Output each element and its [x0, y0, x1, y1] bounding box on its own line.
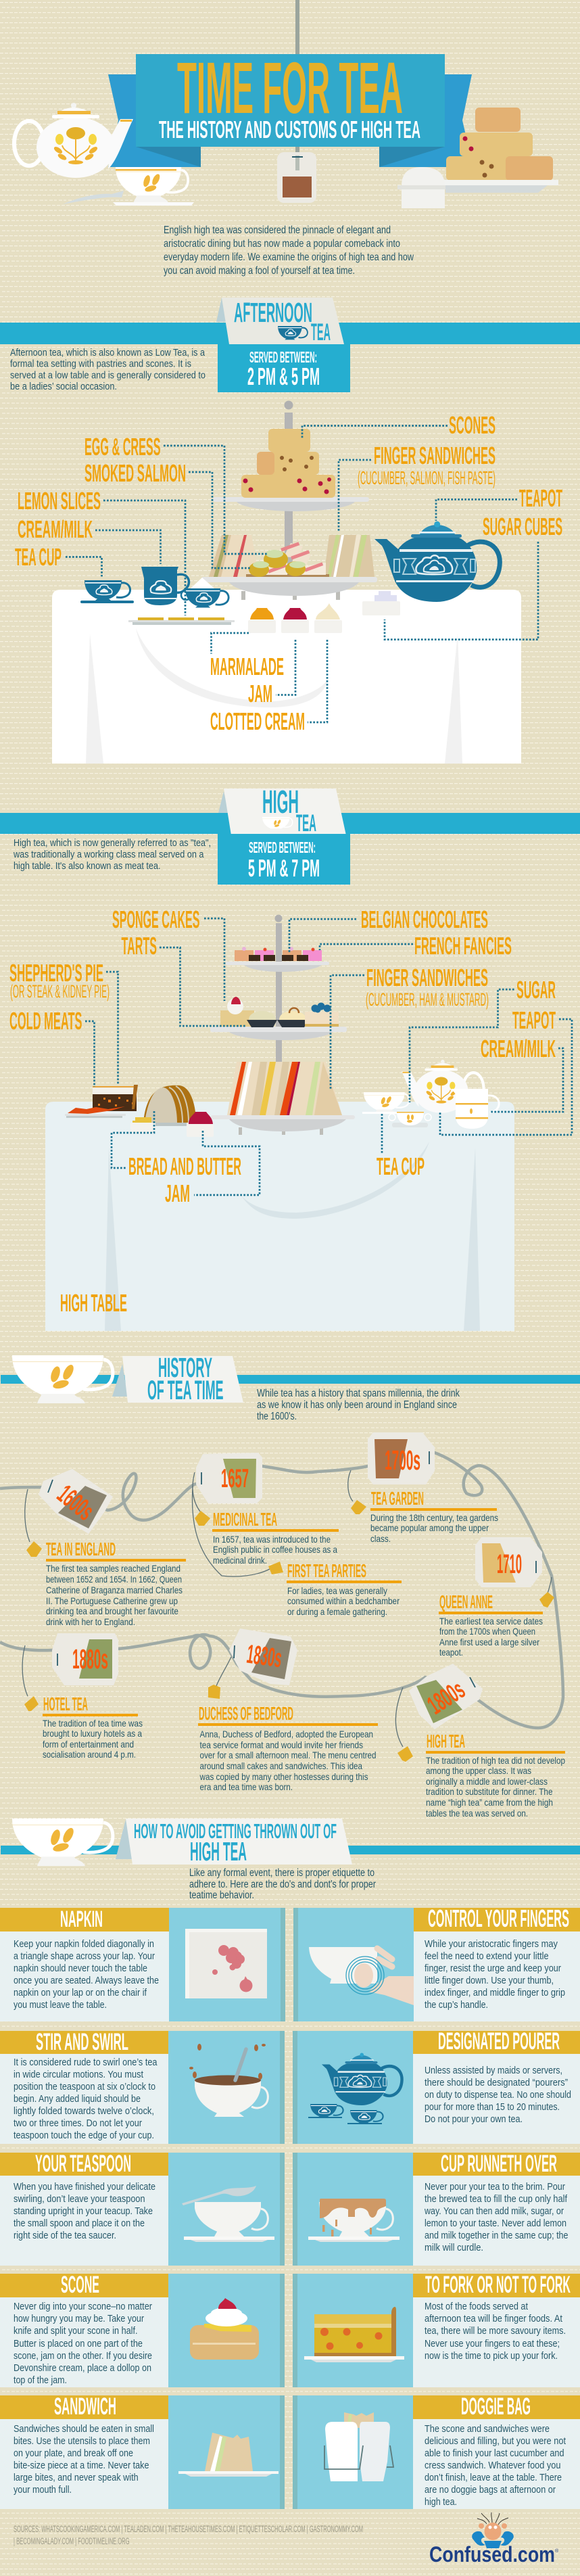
history entry: duchess of bedford: tea service format and would invite her friends: [200, 1739, 363, 1750]
banner panel: [136, 54, 445, 147]
panel: designated pourer: [293, 2028, 580, 2144]
history entry: medicinal tea: [212, 1509, 339, 1566]
egg and cress and salmon sandwiches: [246, 542, 329, 577]
section header: high tea: HIGH: [262, 784, 299, 820]
wordmark: Confused.com: [429, 2542, 555, 2567]
cloth folds: [105, 1142, 480, 1331]
butter dish: [130, 1117, 155, 1133]
labels: TARTS: [122, 932, 157, 960]
history entry: duchess of bedford: around small cakes and sandwiches. This idea: [200, 1760, 362, 1771]
finger sandwiches right: [324, 535, 374, 577]
section header: afternoon tea: [0, 297, 580, 392]
section header: high tea: [0, 784, 580, 885]
ribbon folds: [136, 147, 445, 167]
body text: two or three times. Do not let your: [14, 2117, 142, 2129]
body text: you must leave the table.: [14, 1999, 107, 2011]
body text: [14, 2423, 154, 2496]
history entry: duchess of bedford: Anna, Duchess of Bedford, adopted the European: [200, 1729, 373, 1739]
body text: napkin on your lap or on the chair if: [14, 1987, 147, 1998]
labels: EGG & CRESS: [84, 433, 161, 461]
logo: confused.com: [429, 2512, 559, 2567]
labels: SHEPHERD'S PIE: [9, 959, 103, 987]
body text: [424, 2181, 568, 2253]
history entry: tea in england: The first tea samples reached England: [46, 1563, 180, 1574]
body text: your mouth full.: [14, 2484, 72, 2496]
icon: overflowing cup: [308, 2199, 400, 2242]
scones: [241, 429, 335, 498]
icon: stirred tea cup: [189, 2044, 268, 2117]
labels: HIGH TABLE: [60, 1289, 127, 1317]
ribbon left tail: [108, 74, 201, 167]
labels: JAM: [248, 680, 272, 707]
body text: bite-size piece at a time. Never take: [14, 2460, 149, 2471]
body text: [425, 1938, 565, 2011]
history entry: first tea parties: For ladies, tea was generally: [287, 1585, 387, 1596]
tea bag: 1657: 1657: [221, 1464, 249, 1493]
tea bag: 1710: [475, 1537, 542, 1587]
icon: scone with cream: [190, 2298, 259, 2360]
history entry: medicinal tea: medicinal drink.: [213, 1555, 267, 1566]
icon: blue teapot: [374, 521, 500, 602]
icon: milk jug: [452, 1089, 499, 1129]
history entry: tea in england: drinking tea and brought her favourite: [46, 1606, 178, 1616]
icon: paper bag with sandwich: [324, 2412, 393, 2481]
history entry: tea in england: drink with her to England.: [46, 1616, 135, 1627]
history entry: hotel tea: socialisation around 4 p.m.: [43, 1749, 136, 1760]
body text: teaspoon touch the edge of your cup.: [14, 2130, 154, 2141]
body text: [14, 2181, 155, 2241]
string of hanging tea bag: [295, 0, 299, 162]
labels: JAM: [165, 1179, 190, 1207]
french fancies and belgian chocolates: [235, 947, 322, 961]
labels: [15, 411, 562, 735]
table cloth: [52, 590, 521, 764]
labels: CLOTTED CREAM: [210, 707, 305, 735]
icon: teacup with spoon: [63, 167, 194, 206]
labels: BREAD AND BUTTER: [128, 1152, 241, 1180]
icon: mascot: [472, 2512, 514, 2548]
labels: [9, 906, 556, 1317]
tea bag: 1600s: 1600s: [51, 1480, 99, 1526]
body text: It is considered rude to swirl one’s tea: [14, 2057, 158, 2068]
body text: [14, 1938, 159, 2011]
labels: TEA CUP: [15, 543, 62, 571]
ribbon right tail: [379, 74, 473, 167]
section header: afternoon tea: SERVED BETWEEN:: [249, 348, 317, 366]
icon: scones on plate with ramekin: [397, 108, 558, 208]
served between box: [218, 344, 350, 392]
cloth folds: [86, 628, 462, 764]
body text: begin. Any added liquid should be: [14, 2093, 141, 2105]
section header: afternoon tea: 2 PM & 5 PM: [247, 362, 320, 390]
icon: cup with spoon: [182, 2186, 274, 2242]
band: [1, 1846, 580, 1854]
icon: quiche slice: [304, 2307, 404, 2362]
panel: scone: SCONE: [61, 2272, 99, 2298]
body text: little finger down. Use your thumb,: [425, 1975, 554, 1986]
labels: MARMALADE: [210, 653, 284, 680]
body text: swirling, don’t leave your teaspoon: [14, 2193, 145, 2205]
sponge cake: [220, 997, 254, 1027]
panel: sandwich: SANDWICH: [54, 2393, 116, 2420]
icon: big white cup: [12, 1819, 113, 1866]
panel: cup runneth over: [293, 2151, 580, 2266]
history entry: hotel tea: form of entertainment and: [43, 1739, 134, 1750]
cake stand: [210, 914, 355, 1135]
history entry: tea in england: Catherine of Braganza married Charles: [46, 1585, 183, 1595]
body text: the small spoon and place it on the: [14, 2218, 145, 2229]
body text: The scone and sandwiches were: [425, 2423, 550, 2435]
body text: bites. Use the utensils to place them: [14, 2435, 150, 2447]
history entry: medicinal tea: English public in coffee houses as a: [213, 1544, 337, 1555]
intro text: English high tea was considered the pinnacle of elegant and: [164, 225, 391, 236]
intro text: you can avoid making a fool of yourself at tea time.: [164, 265, 355, 277]
tent card side: [112, 1364, 128, 1397]
pots of marmalade, jam and clotted cream: [248, 603, 342, 633]
high tea description: was traditionally a working class meal served on a: [13, 849, 204, 860]
panel: your teaspoon: YOUR TEASPOON: [35, 2151, 131, 2177]
body text: cress sandwich. Whatever food you: [425, 2460, 561, 2471]
afternoon tea description: formal tea setting with pastries and scones. It is: [10, 358, 191, 369]
labels: COLD MEATS: [9, 1007, 82, 1035]
icon: white cup: [262, 817, 293, 831]
icon: tea cup and saucer: [80, 580, 134, 603]
tent card side: [218, 791, 228, 813]
blueberry cake: [305, 1002, 339, 1027]
panel: stir and swirl: STIR AND SWIRL: [36, 2029, 128, 2055]
icon: big white cup: [12, 1355, 113, 1403]
sugar cubes pot: [362, 591, 400, 615]
jam pot: [187, 1112, 214, 1137]
body text: Most of the foods served at: [425, 2301, 529, 2312]
panel: sandwich: [0, 2393, 285, 2509]
panel: your teaspoon: [0, 2151, 285, 2266]
panel: napkin: NAPKIN: [60, 1906, 103, 1932]
panel: control your fingers: [293, 1904, 580, 2021]
served between box: [218, 834, 350, 885]
history entry: first tea parties: consumed within a bedchamber: [287, 1595, 400, 1606]
tent card: [122, 1356, 243, 1403]
section header: history of tea time: [1, 1352, 580, 1405]
etiquette intro text: [189, 1867, 376, 1901]
icon: blue cup: [278, 326, 308, 339]
history entry: tea in england: TEA IN ENGLAND: [46, 1539, 116, 1560]
history intro text: the 1600's.: [257, 1411, 297, 1422]
history entry: hotel tea: brought to luxury hotels as a: [43, 1728, 142, 1739]
etiquette intro text: adhere to. Here are the do's and dont's for proper: [189, 1879, 376, 1890]
bread loaf: [143, 1085, 196, 1126]
band: [0, 323, 580, 344]
history entry: queen anne: Anne first used a large silver: [439, 1637, 539, 1647]
labels: TEA CUP: [377, 1152, 425, 1180]
history entry: high tea: tradition to substitute for dinner. The: [426, 1786, 553, 1797]
body text: When you have finished your delicate: [14, 2181, 155, 2193]
tea bag: 1880s: [52, 1633, 118, 1685]
icon: hand holding cup: [309, 1947, 414, 2005]
body text: position the teaspoon at six o’clock to: [14, 2081, 155, 2092]
body text: the cup’s handle.: [425, 1999, 488, 2011]
section header: high tea: TEA: [296, 810, 316, 837]
icon: small cup: [389, 1112, 431, 1127]
panel: afternoon tea table: [15, 400, 562, 764]
cake stand: [201, 400, 377, 600]
body text: While your aristocratic fingers may: [425, 1938, 558, 1950]
section header: afternoon tea: AFTERNOON: [234, 297, 312, 328]
tea bag: 1600s: [39, 1469, 113, 1534]
panel: to fork or not to fork: [293, 2272, 580, 2387]
tent card: [222, 298, 344, 344]
afternoon tea description: be a ladies’ social occasion.: [10, 381, 117, 392]
body text: Do not pour your own tea.: [425, 2113, 523, 2125]
intro text: [164, 225, 414, 277]
tent card: [224, 789, 346, 835]
history entry: queen anne: teapot.: [439, 1647, 463, 1658]
history entry: duchess of bedford: [198, 1703, 378, 1792]
history entry: first tea parties: FIRST TEA PARTIES: [287, 1560, 366, 1581]
tarts: [247, 1008, 309, 1027]
labels: (OR STEAK & KIDNEY PIE): [10, 981, 110, 1002]
labels: CREAM/MILK: [18, 515, 93, 543]
high tea description: [13, 838, 211, 872]
tea bag: 1880s: 1880s: [72, 1643, 108, 1675]
sources: [14, 2524, 363, 2546]
title banner: [108, 0, 473, 167]
body text: a triangle shape across your lap. Your: [14, 1950, 155, 1962]
tea bag: 1700s: 1700s: [385, 1445, 420, 1476]
history entry: tea garden: TEA GARDEN: [371, 1488, 424, 1509]
body text: high tea.: [425, 2496, 457, 2508]
tea bag: 1830s: 1830s: [245, 1640, 284, 1673]
leader lines: [85, 918, 572, 1195]
history entry: high tea: [426, 1731, 565, 1819]
history entry: queen anne: The earliest tea service dates: [439, 1616, 543, 1626]
body text: scone, jam on the other. If you desire: [14, 2350, 152, 2362]
etiquette intro text: teatime behavior.: [189, 1890, 254, 1901]
history entry: first tea parties: or during a female gathering.: [287, 1606, 387, 1617]
history entry: hotel tea: HOTEL TEA: [43, 1693, 88, 1714]
high tea description: High tea, which is now generally referred to as "tea",: [14, 838, 211, 849]
icon: tea bag: [277, 152, 316, 203]
leader lines: [66, 426, 538, 722]
table cloth: [45, 1102, 514, 1331]
panel: doggie bag: [293, 2393, 580, 2509]
history entry: tea garden: [370, 1488, 498, 1544]
history intro text: as we know it has only been around in England since: [257, 1399, 457, 1411]
icon: white teapot: [14, 103, 133, 178]
labels: SMOKED SALMON: [84, 459, 186, 487]
labels: LEMON SLICES: [18, 487, 101, 515]
icon: tea cup: [362, 1092, 409, 1114]
intro text: aristocratic dining but has now made a popular comeback into: [164, 238, 400, 250]
icon: second tea cup with cream: [181, 578, 228, 607]
section header: history of tea time: HISTORY: [158, 1352, 212, 1383]
history entry: duchess of bedford: over for a small afternoon meal. The menu centred: [200, 1750, 376, 1760]
history entry: tea in england: between 1652 and 1654. In 1662, Queen: [46, 1574, 182, 1585]
section header: etiquette: HOW TO AVOID GETTING THROWN OUT OF: [134, 1820, 337, 1843]
section header: high tea: SERVED BETWEEN:: [249, 839, 316, 856]
body text: Never dig into your scone–no matter: [14, 2301, 152, 2312]
history entry: tea in england: [46, 1539, 186, 1627]
body text: Sandwiches should be eaten in small: [14, 2423, 154, 2435]
section header: etiquette: [1, 1819, 580, 1867]
body text: are no doggie bags at afternoon or: [425, 2484, 556, 2496]
section header: high tea: 5 PM & 7 PM: [248, 854, 320, 882]
section header: etiquette: HIGH TEA: [190, 1837, 247, 1867]
history entry: high tea: HIGH TEA: [427, 1731, 465, 1752]
lemon slices plate: [128, 617, 235, 625]
tags: [24, 1500, 554, 1762]
afternoon tea description: Afternoon tea, which is also known as Low Tea, is a: [10, 348, 206, 358]
body text: milk will curdle.: [425, 2242, 483, 2253]
history entry: tea garden: became popular among the upper: [370, 1522, 489, 1533]
body text: now is the time to pick up your fork.: [425, 2350, 558, 2362]
body text: [425, 2301, 566, 2362]
tent card side: [216, 298, 226, 322]
history entry: queen anne: from the 1700s when Queen: [439, 1626, 535, 1637]
panel: high tea table: [9, 906, 572, 1331]
history entry: high tea: among the upper class. It was: [426, 1765, 531, 1776]
history entry: first tea parties: [287, 1560, 402, 1617]
tea bag: 1710: 1710: [497, 1549, 522, 1579]
body text: [14, 2301, 152, 2386]
body text: [425, 2423, 566, 2508]
body text: lightly folded towards twelve o’clock,: [14, 2105, 154, 2117]
history entry: hotel tea: The tradition of tea time was: [43, 1718, 143, 1729]
etiquette intro text: Like any formal event, there is proper etiquette to: [189, 1867, 374, 1879]
body text: napkin should never touch the table: [14, 1963, 147, 1974]
body text: in wide circular motions. You must: [14, 2069, 144, 2080]
body text: standing upright in your teacup. Take: [14, 2205, 153, 2217]
body text: knife and split your scone in half.: [14, 2325, 138, 2337]
panel: napkin: [0, 1906, 285, 2021]
body text: once you are seated. Always leave the: [14, 1975, 159, 1986]
icon: teapot and cups: [308, 2053, 402, 2124]
tea bag: 1657: [196, 1453, 262, 1503]
history entry: hotel tea: [43, 1693, 143, 1760]
history entry: tea garden: class.: [370, 1533, 391, 1544]
history entry: queen anne: QUEEN ANNE: [439, 1591, 493, 1612]
body text: on your plate, and break off one: [14, 2448, 133, 2459]
body text: [14, 2057, 158, 2141]
tag strings: [22, 1470, 552, 1747]
body text: Keep your napkin folded diagonally in: [14, 1938, 154, 1950]
tea bag: 1830s: [229, 1629, 297, 1685]
afternoon tea description: [10, 348, 206, 392]
history entry: high tea: tables the tea was served on.: [426, 1808, 528, 1819]
intro text: everyday modern life. We examine the origins of high tea and how: [164, 252, 414, 263]
icon: bitten sandwich: [178, 2433, 279, 2477]
history entry: high tea: originally a middle and lower-class: [426, 1776, 548, 1787]
icon: stained napkin: [185, 1929, 267, 1998]
history intro text: While tea has a history that spans millennia, the drink: [257, 1388, 460, 1399]
tea bag: 1800s: [409, 1664, 483, 1729]
body text: [425, 2065, 571, 2125]
history intro text: [257, 1388, 460, 1422]
body text: Butter is placed on one part of the: [14, 2338, 143, 2349]
body text: how hungry you may be. Take your: [14, 2313, 144, 2324]
tea bag: 1700s: [368, 1432, 435, 1484]
panel: stir and swirl: [0, 2029, 285, 2144]
tea bag: 1800s: 1800s: [422, 1675, 470, 1720]
panel: scone: [0, 2272, 285, 2387]
body text: large bites, and never speak with: [14, 2472, 139, 2483]
history entry: high tea: name “high tea” came from the high: [426, 1797, 553, 1808]
labels: SPONGE CAKES: [112, 906, 200, 933]
history entry: duchess of bedford: era and tea time was born.: [200, 1781, 293, 1792]
body text: top of the jam.: [14, 2374, 67, 2386]
history entry: tea garden: During the 18th century, tea gardens: [370, 1512, 498, 1523]
high tea description: high table. It's also known as meat tea.: [14, 861, 161, 872]
history entry: queen anne: [439, 1591, 543, 1658]
body text: right side of the tea saucer.: [14, 2230, 116, 2241]
icon: white teapot: [402, 1060, 484, 1113]
section header: afternoon tea: TEA: [311, 319, 331, 346]
history entry: medicinal tea: In 1657, tea was introduced to the: [213, 1534, 331, 1545]
finger sandwich stack: [227, 1062, 342, 1115]
body text: Devonshire cream, place a dollop on: [14, 2362, 151, 2374]
band: [1, 1375, 580, 1384]
history entry: tea in england: II. The Portuguese Catherine grew up: [46, 1595, 178, 1606]
body text: feel the need to extend your little: [425, 1950, 549, 1962]
finger sandwiches left: [209, 535, 259, 577]
tent card side: [116, 1819, 132, 1859]
tent card: [126, 1819, 352, 1865]
history entry: duchess of bedford: was copied by many other hostesses during this: [199, 1771, 368, 1782]
band: [0, 813, 580, 834]
labels: SCONES: [449, 411, 496, 439]
sources: | BECOMINGALADY.COM | FOODTIMELINE.ORG: [14, 2536, 130, 2546]
afternoon tea description: served at a low table and is generally considered to: [10, 371, 206, 381]
registered mark: ®: [555, 2548, 559, 2554]
timeline string: [0, 1453, 563, 1728]
shepherd's pie on plate with cold meats: [65, 1085, 138, 1118]
section header: history of tea time: OF TEA TIME: [147, 1376, 223, 1405]
history entry: duchess of bedford: DUCHESS OF BEDFORD: [199, 1703, 293, 1724]
history entry: medicinal tea: MEDICINAL TEA: [213, 1509, 277, 1530]
icon: milk jug: [141, 567, 189, 605]
